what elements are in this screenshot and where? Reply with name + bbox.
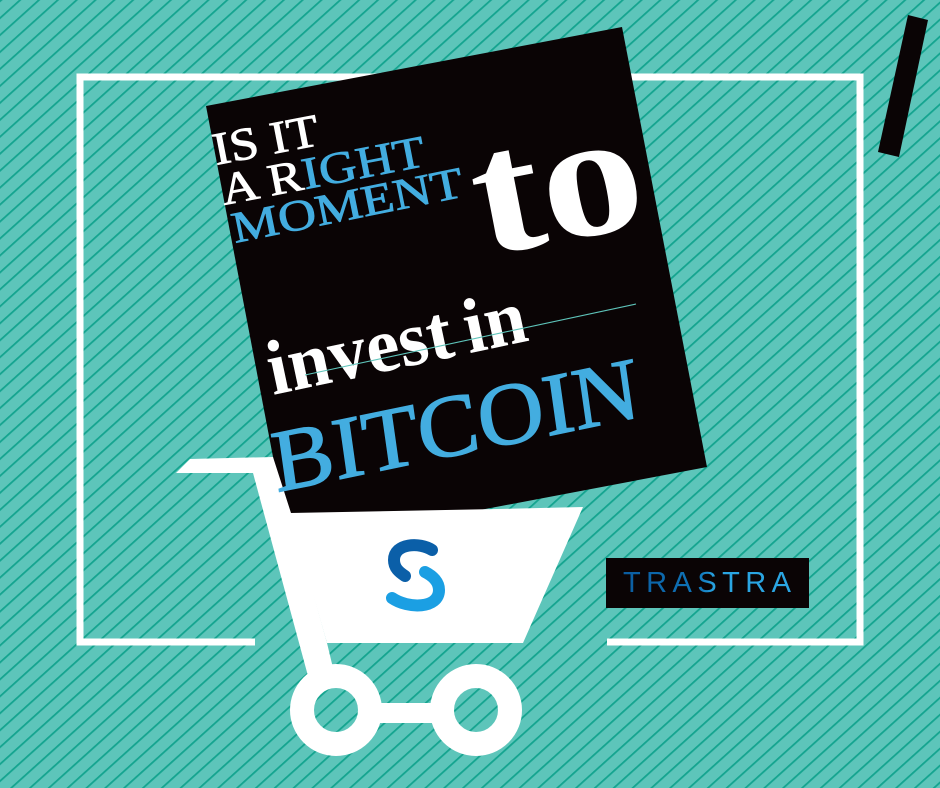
headline text <box>208 70 658 512</box>
TRASTRA logo badge <box>606 558 809 608</box>
text: to: to <box>454 70 658 294</box>
right wheel <box>442 676 510 744</box>
cart axle <box>370 703 450 723</box>
strike line <box>305 304 636 375</box>
text: IS IT: IS IT <box>208 104 323 175</box>
shopping cart <box>176 457 583 744</box>
text: MOMENT: MOMENT <box>227 158 467 253</box>
black tilted headline panel <box>206 27 707 546</box>
black slash accent <box>878 15 928 157</box>
logo wordmark: TRASTRA <box>623 567 792 599</box>
text: A RIGHT: A RIGHT <box>216 126 429 215</box>
left wheel <box>302 676 370 744</box>
white frame <box>80 77 860 642</box>
icon: S logo <box>392 545 439 605</box>
cart basket <box>290 507 583 643</box>
text: BITCOIN: BITCOIN <box>266 340 645 512</box>
badge background <box>606 558 809 608</box>
cart handle and shaft <box>176 457 333 676</box>
text: invest in: invest in <box>258 272 534 412</box>
